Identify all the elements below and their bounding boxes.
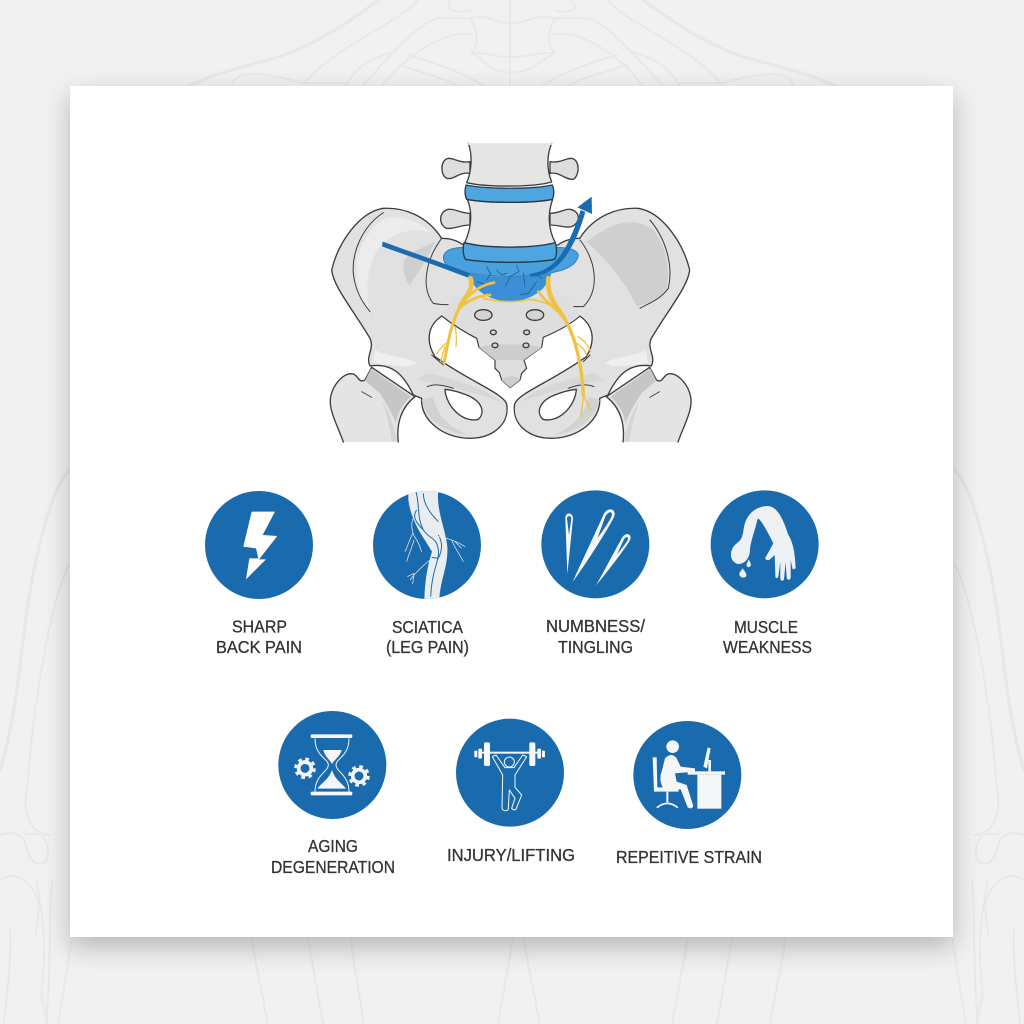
femurs (330, 367, 691, 442)
intervertebral discs (463, 185, 557, 262)
arrow: herniation direction left (382, 242, 470, 278)
label: sharp back pain (216, 616, 302, 657)
label: sciatica: (LEG PAIN) (386, 637, 469, 657)
illustration: lumbar spine and pelvis (330, 143, 691, 442)
hip shading (356, 217, 668, 435)
label: sharp back pain: BACK PAIN (216, 637, 302, 657)
label: sciatica (386, 617, 469, 657)
label: numbness and tingling (546, 616, 645, 657)
arrow: herniation direction right (529, 197, 592, 277)
icon: sciatica leg nerves (373, 490, 481, 600)
icon: muscle weakness arm (711, 490, 819, 598)
label: muscle weakness: WEAKNESS (723, 637, 812, 657)
icon: sharp back pain lightning (205, 491, 313, 599)
hip bones (332, 208, 690, 438)
icon: aging hourglass and gears (278, 711, 386, 819)
label: muscle weakness (723, 617, 812, 657)
label: sharp back pain: SHARP (232, 616, 287, 636)
vertebrae (465, 143, 555, 247)
ruptured nucleus (468, 272, 552, 301)
sciatic nerves (437, 278, 591, 417)
sacrum (442, 297, 580, 388)
transverse processes (441, 158, 578, 228)
icon: injury weightlifter (456, 719, 564, 827)
label: aging degeneration: AGING (308, 836, 358, 856)
sacral foramina (475, 310, 544, 348)
label: muscle weakness: MUSCLE (734, 617, 798, 637)
row 2: causes (271, 711, 762, 877)
herniated disc bulge (443, 247, 578, 277)
label: sciatica: SCIATICA (392, 617, 463, 637)
femur shading (365, 369, 656, 423)
hip contour lines (353, 213, 670, 388)
label: numbness and tingling: NUMBNESS/ (546, 616, 645, 636)
label: repetitive strain: REPEITIVE STRAIN (616, 847, 762, 867)
icon: numbness needles (541, 490, 649, 598)
label: aging degeneration: DEGENERATION (271, 857, 395, 877)
label: numbness and tingling: TINGLING (558, 637, 633, 657)
panel: main white card (70, 86, 953, 937)
icon: repetitive strain desk worker (633, 721, 741, 829)
label: aging degeneration (271, 836, 395, 877)
label: injury and lifting: INJURY/LIFTING (447, 845, 575, 865)
row 1: symptoms (205, 490, 819, 657)
